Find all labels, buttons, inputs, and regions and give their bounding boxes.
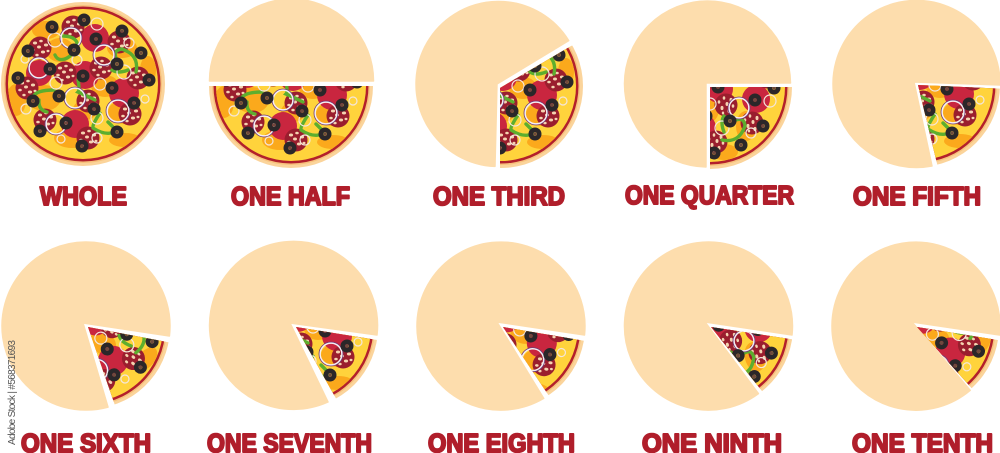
remaining pale part: fifth	[833, 0, 1000, 167]
remaining pale part: seventh	[210, 241, 378, 409]
pizza slice: half	[209, 86, 373, 168]
pizza slice: sixth	[88, 327, 168, 404]
panel: one sixth	[1, 241, 171, 453]
label: one quarter: ONE QUARTER	[625, 182, 794, 210]
label: one half: ONE HALF	[231, 183, 350, 211]
pizza slice: ninth	[711, 327, 792, 391]
pizza slice: fifth	[918, 85, 1000, 164]
remaining pale part: half	[210, 0, 374, 81]
panel: one half	[209, 0, 374, 211]
panel: one quarter	[625, 1, 794, 210]
icon: whole pizza	[1, 2, 165, 166]
stock id credit: Adobe Stock | #568371693	[7, 340, 18, 445]
panel: one eighth	[416, 241, 586, 453]
remaining pale part: quarter	[625, 1, 790, 167]
panel: one seventh	[207, 241, 378, 453]
pizza slice: eighth	[503, 327, 584, 395]
panel: one tenth	[831, 241, 1000, 453]
panel: one ninth	[624, 241, 794, 453]
label: one third: ONE THIRD	[433, 183, 565, 211]
pizza slice: seventh	[296, 327, 377, 398]
remaining pale part: sixth	[2, 242, 170, 410]
remaining pale part: third	[416, 1, 569, 166]
remaining pale part: ninth	[624, 242, 792, 410]
pizza slice: third	[500, 46, 583, 168]
pizza slice: quarter	[710, 87, 792, 169]
remaining pale part: tenth	[832, 242, 1000, 410]
pizza slice: tenth	[917, 327, 998, 388]
panel: one fifth	[833, 0, 1000, 211]
label: one fifth: ONE FIFTH	[853, 183, 981, 211]
label: whole: WHOLE	[40, 183, 127, 211]
remaining pale part: eighth	[417, 242, 585, 410]
panel: whole pizza	[1, 2, 165, 211]
panel: one third	[416, 1, 583, 211]
